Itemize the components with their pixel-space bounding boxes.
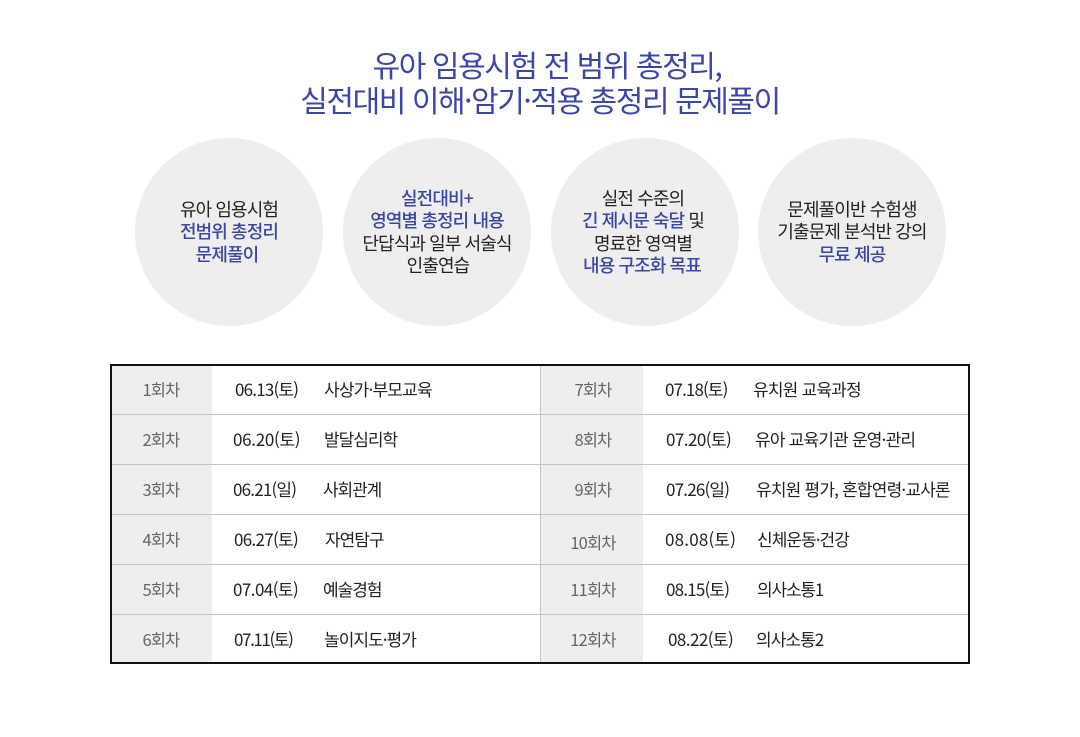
schedule table xyxy=(110,364,970,664)
circle: exam scope: 유아 임용시험 xyxy=(180,196,278,222)
schedule table: 07.04(토) xyxy=(233,576,298,601)
title: 실전대비 이해·암기·적용 총정리 문제풀이 xyxy=(300,77,780,121)
schedule table: 예술경험 xyxy=(323,576,382,601)
schedule table: 자연탐구 xyxy=(325,526,384,551)
schedule table: 07.18(토) xyxy=(665,376,727,401)
schedule table: 발달심리학 xyxy=(324,426,397,451)
schedule table: 7회차 xyxy=(574,377,612,401)
circle: reading skills: 긴 제시문 숙달 및 xyxy=(582,207,704,233)
schedule table: 1회차 xyxy=(142,377,180,401)
schedule table: 08.15(토) xyxy=(666,576,729,601)
schedule table: 12회차 xyxy=(570,627,616,651)
circle: practical preparation: 영역별 총정리 내용 xyxy=(370,207,504,233)
schedule table: 4회차 xyxy=(142,527,180,551)
schedule table: 9회차 xyxy=(574,477,612,501)
schedule table: 3회차 xyxy=(142,477,180,501)
circle: practical preparation xyxy=(343,138,531,326)
circle: exam scope: 전범위 총정리 xyxy=(180,218,278,244)
schedule table: 08.08(토) xyxy=(665,526,736,551)
schedule table: 사상가·부모교육 xyxy=(324,376,432,401)
circle: exam scope xyxy=(135,138,323,326)
circle: free lecture: 문제풀이반 수험생 xyxy=(787,196,917,222)
schedule table: 06.13(토) xyxy=(235,376,298,401)
schedule table: 2회차 xyxy=(142,427,180,451)
title: 유아 임용시험 전 범위 총정리, xyxy=(373,42,721,86)
title xyxy=(300,42,780,121)
circle: practical preparation: 단답식과 일부 서술식 xyxy=(362,230,512,256)
circle: free lecture: 기출문제 분석반 강의 xyxy=(777,218,927,244)
schedule table: 놀이지도·평가 xyxy=(324,626,416,651)
schedule table: 07.11(토) xyxy=(234,626,292,651)
schedule table: 유치원 평가, 혼합연령·교사론 xyxy=(756,476,950,501)
schedule table: 5회차 xyxy=(142,577,180,601)
circle: practical preparation: 실전대비+ xyxy=(401,185,473,211)
circle: reading skills: 내용 구조화 목표 xyxy=(583,252,701,278)
schedule table: 신체운동·건강 xyxy=(757,526,849,551)
schedule table: 06.20(토) xyxy=(233,426,300,451)
schedule table: 6회차 xyxy=(142,627,180,651)
schedule table: 07.20(토) xyxy=(666,426,731,451)
schedule table: 08.22(토) xyxy=(668,626,733,651)
circle: exam scope: 문제풀이 xyxy=(196,241,258,267)
circle: free lecture: 무료 제공 xyxy=(819,241,885,267)
schedule table: 10회차 xyxy=(570,530,616,554)
circle: reading skills: 실전 수준의 xyxy=(602,185,684,211)
schedule table: 06.27(토) xyxy=(234,526,298,551)
circle: reading skills: 명료한 영역별 xyxy=(594,230,692,256)
schedule table: 유아 교육기관 운영·관리 xyxy=(755,426,915,451)
schedule table: 의사소통2 xyxy=(756,626,823,651)
schedule table: 06.21(일) xyxy=(233,476,296,501)
schedule table: 07.26(일) xyxy=(666,476,729,501)
circle: free lecture xyxy=(758,138,946,326)
circle: practical preparation: 인출연습 xyxy=(407,252,469,278)
circle: reading skills xyxy=(551,138,739,326)
schedule table: 11회차 xyxy=(570,577,616,601)
schedule table: 의사소통1 xyxy=(757,576,823,601)
schedule table: 8회차 xyxy=(574,427,612,451)
schedule table: 유치원 교육과정 xyxy=(753,376,861,401)
schedule table: 사회관계 xyxy=(323,476,381,501)
